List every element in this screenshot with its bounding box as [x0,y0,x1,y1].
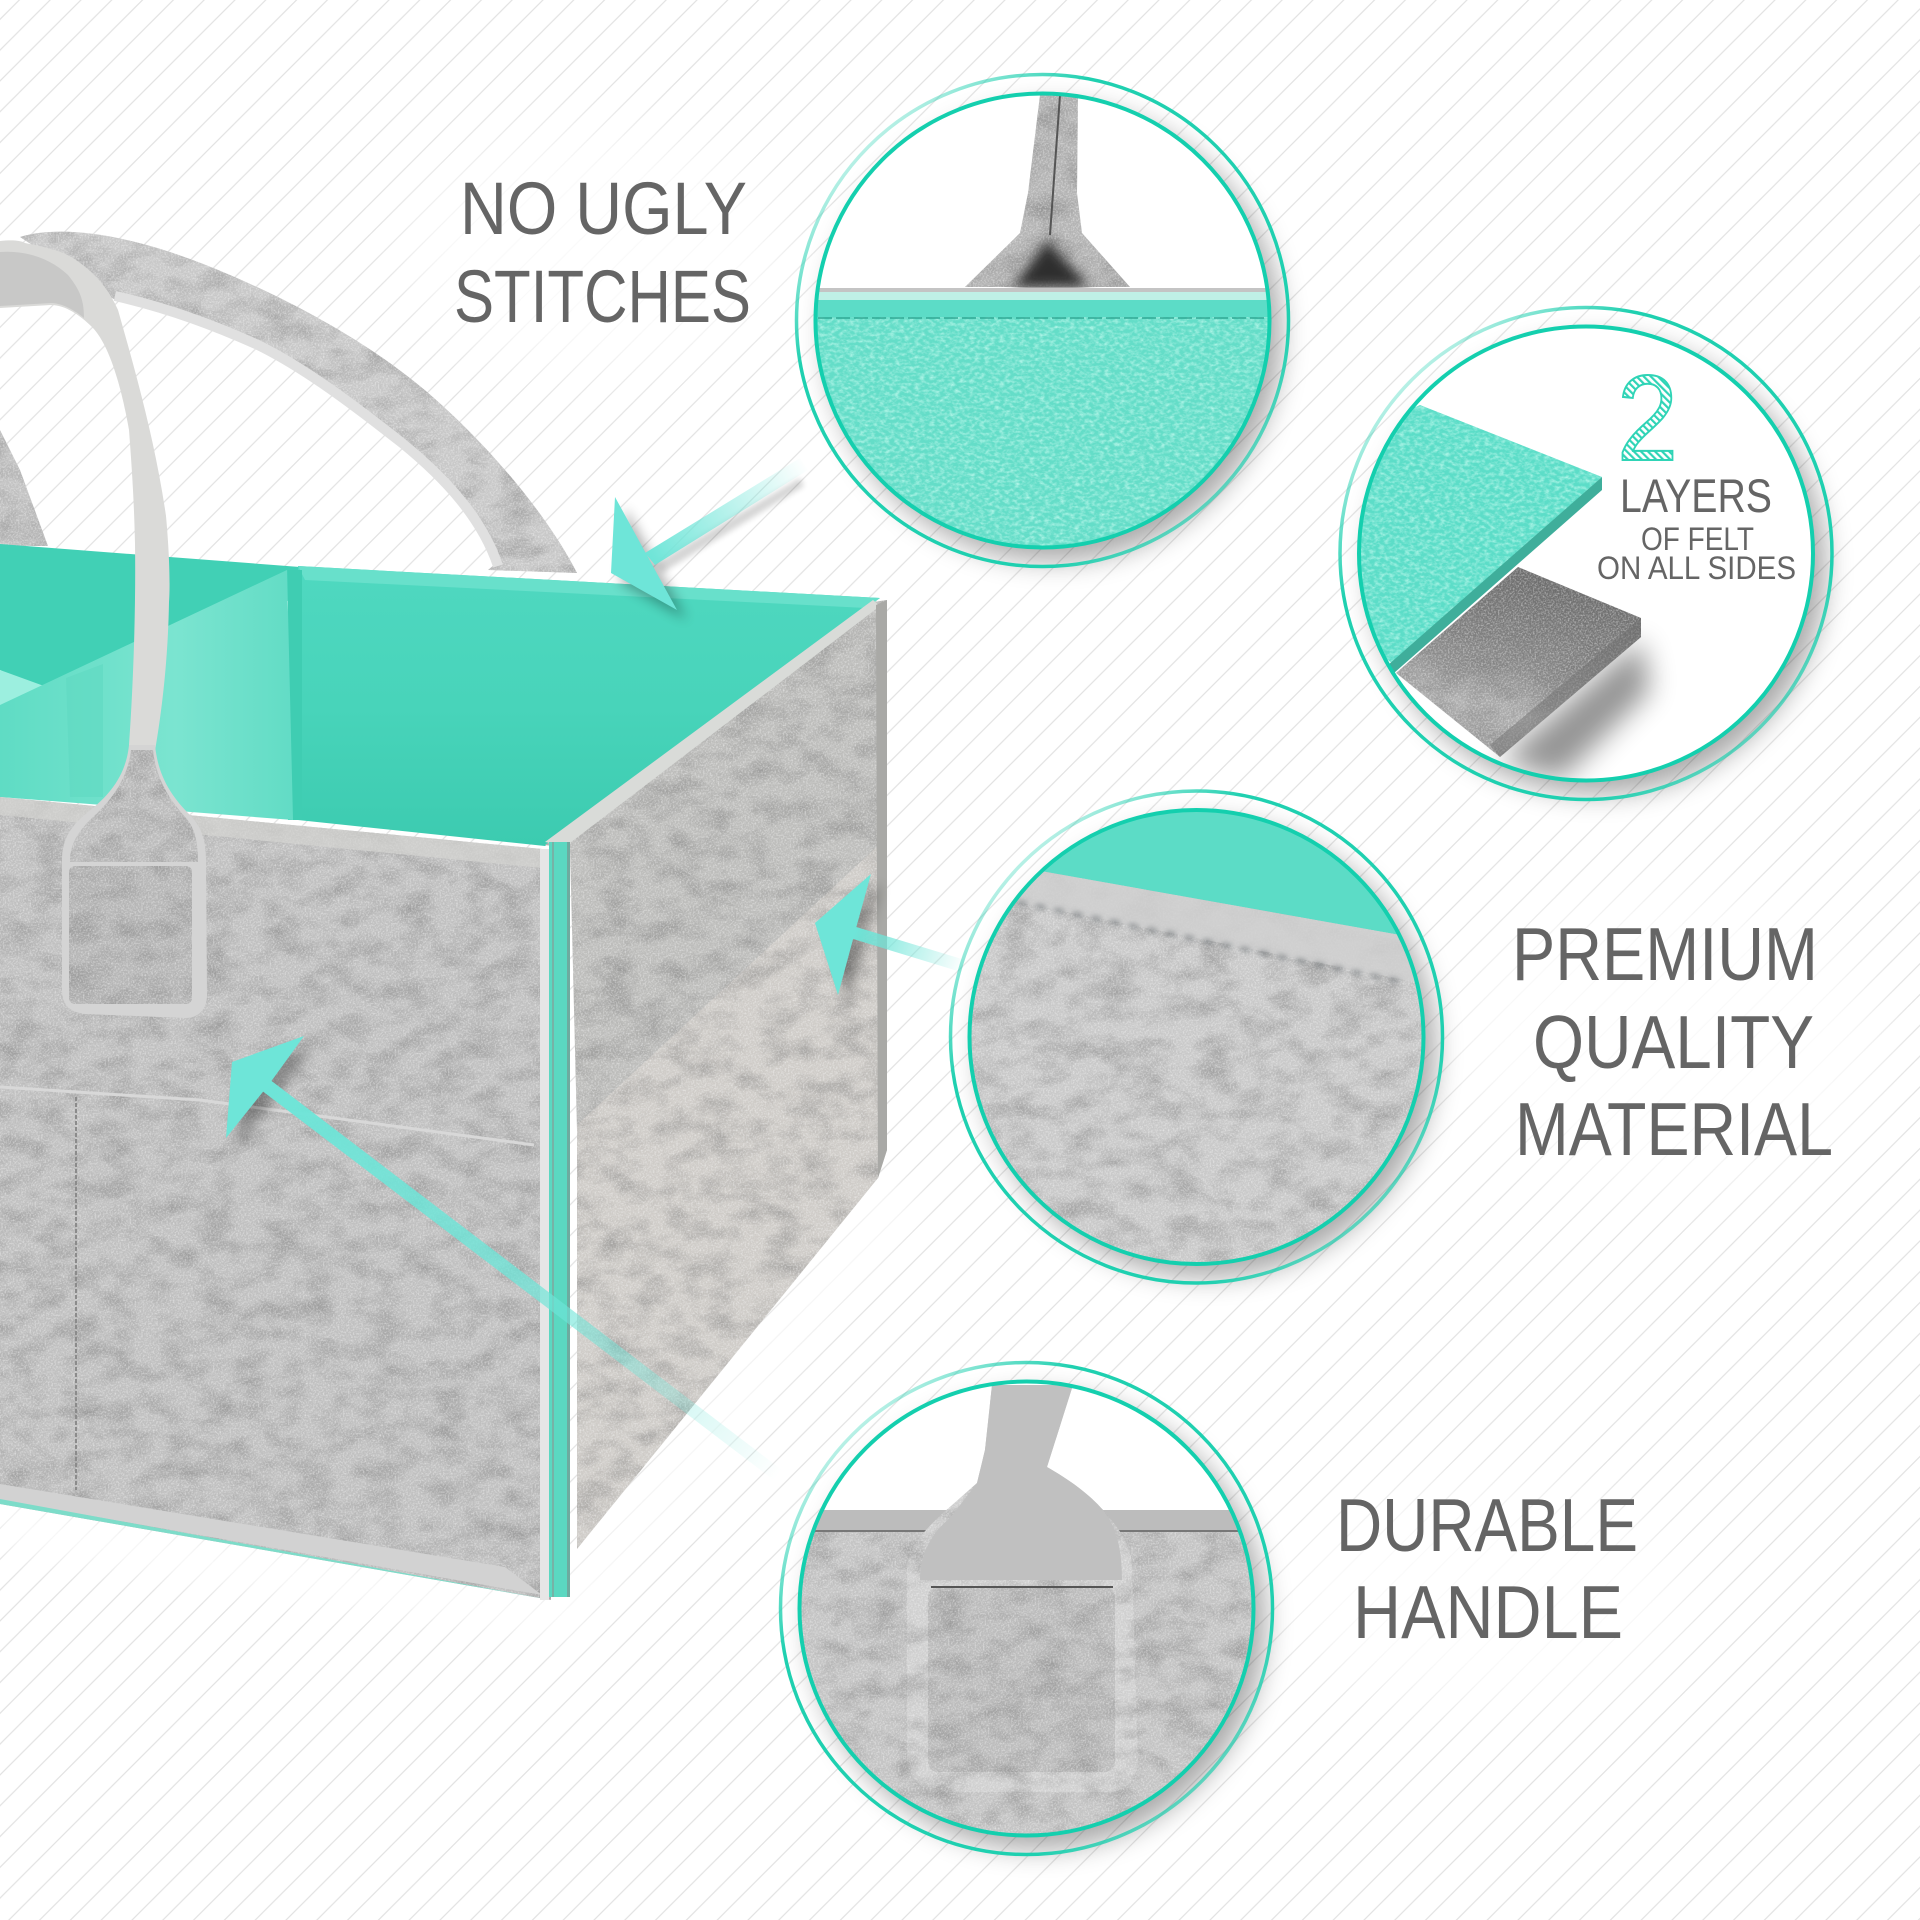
right side: pale top edge [545,600,880,846]
right side: lower pocket [577,843,887,1549]
far left handle stub [0,430,48,546]
front corner seam: teal edging [540,842,570,1600]
handle tab [62,745,207,1018]
heading: no ugly stitches: STITCHES [454,255,751,338]
heading: no ugly stitches [454,167,751,338]
stitching [1017,902,1407,983]
circle: durable handle close-up [780,1362,1272,1854]
caption: layers of felt: OF FELT [1641,521,1754,557]
caption: layers of felt: ON ALL SIDES [1597,550,1796,586]
arrow: to durable handle [226,1036,782,1481]
interior: near-left pale corner [0,670,55,712]
product: felt caddy bag [0,232,887,1600]
circle: 2 layers of felt [1340,308,1832,800]
caption: layers of felt [1597,469,1796,586]
arrow: to premium material [815,874,965,1005]
heading: premium quality material: MATERIAL [1515,1087,1833,1171]
heading: premium quality material: QUALITY [1533,1000,1814,1084]
arrow: to no ugly stitches [611,458,808,620]
interior: back teal wall [288,566,880,846]
numeral 2: 2 [1617,350,1678,486]
handle tab close-up [907,1385,1138,1792]
circle: stitched teal rim detail [796,74,1290,566]
interior: far teal compartment [0,544,300,700]
heading: durable handle: HANDLE [1353,1570,1623,1654]
grey slab shadow [1500,640,1650,780]
grey felt slab [1396,567,1641,757]
right side: upper face [545,600,887,1130]
right side: back edge strip [876,600,887,1178]
teal felt slab [1340,405,1602,673]
heading: no ugly stitches: NO UGLY [460,167,747,250]
grey felt close-up [972,872,1422,1262]
heading: premium quality material: PREMIUM [1512,912,1818,996]
interior: divider panel [0,570,293,820]
circle: premium material close-up [950,791,1442,1283]
handle seam [965,95,1130,287]
teal felt [819,288,1266,292]
back handle [20,232,577,573]
heading: durable handle [1336,1483,1638,1654]
front handle [0,240,170,751]
heading: premium quality material [1512,912,1833,1171]
caption: layers of felt: LAYERS [1620,469,1772,522]
front face [0,797,551,1600]
grey base panel [802,1510,1252,1834]
heading: durable handle: DURABLE [1336,1483,1638,1567]
